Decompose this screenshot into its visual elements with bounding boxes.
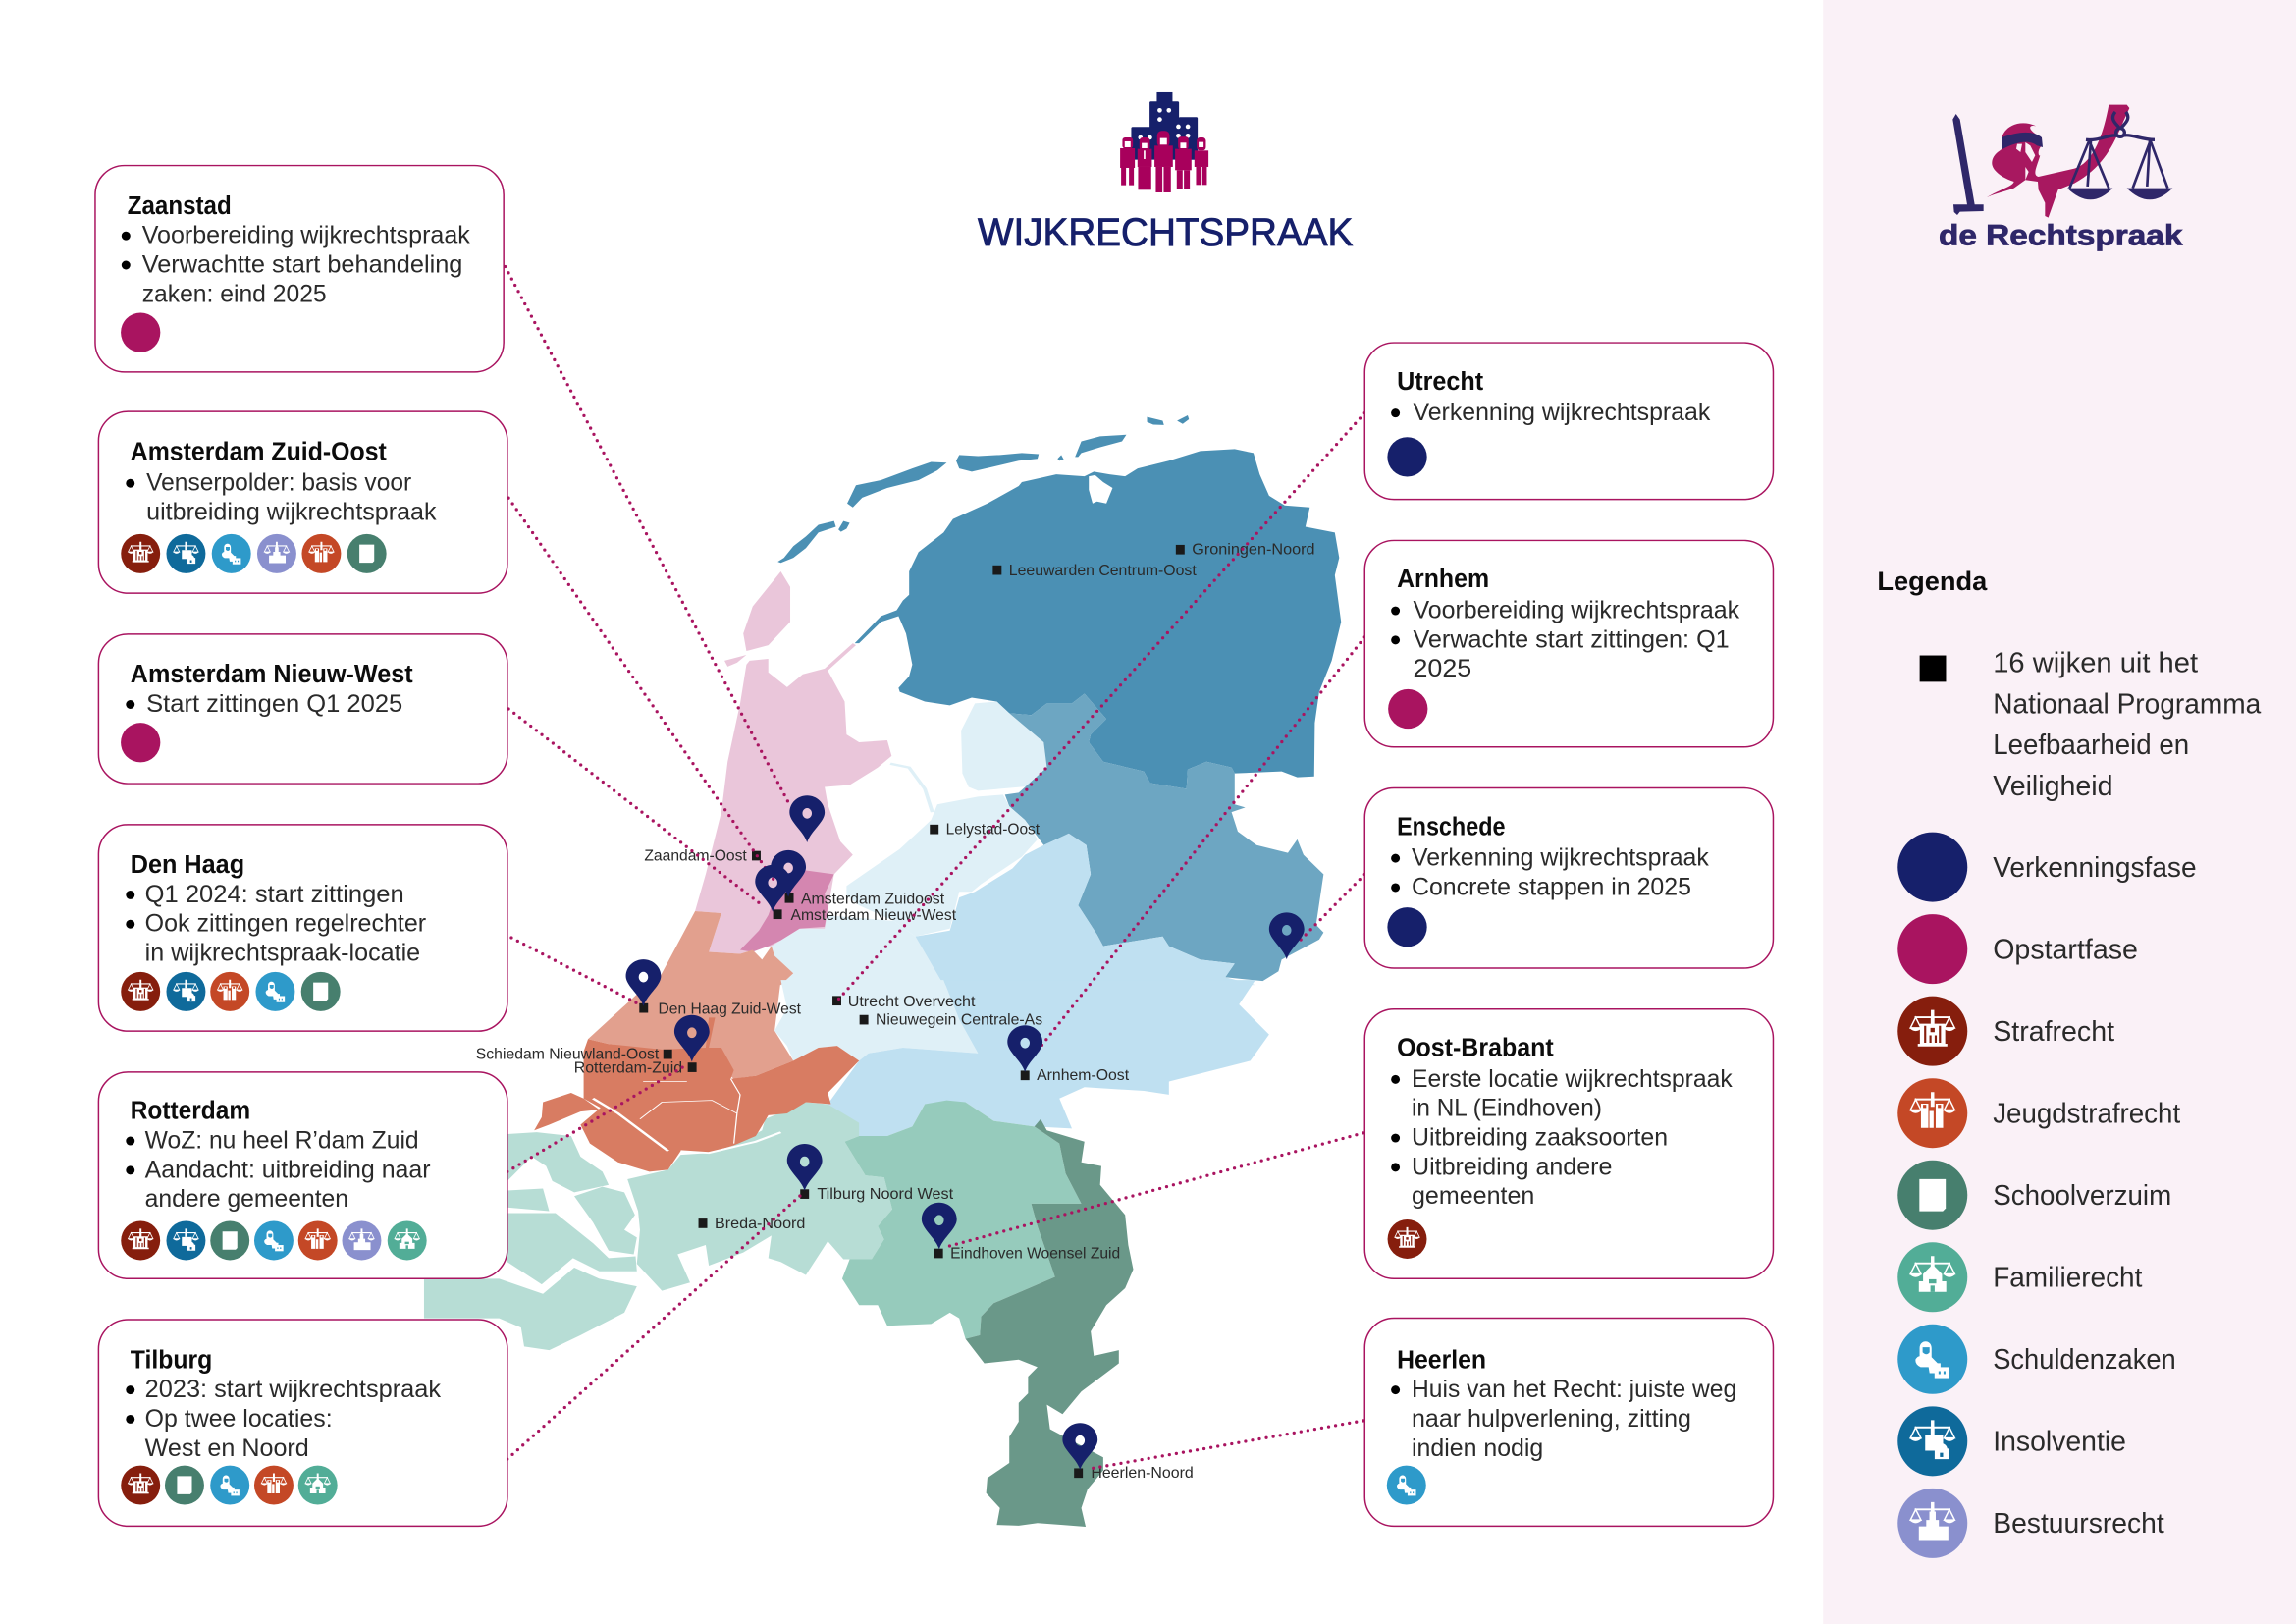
legend item: Familierecht [1897,1242,2142,1312]
panel: Amsterdam Nieuw-West [98,634,507,784]
pin: Arnhem [1007,1025,1042,1072]
legend item: Bestuursrecht: Bestuursrecht [1993,1508,2164,1540]
right side panel background [1823,0,2296,1624]
Zeeland and West-Brabant [424,1103,892,1350]
marker: Groningen-Noord: Groningen-Noord [1192,542,1315,559]
legend item: Bestuursrecht [1897,1489,2164,1558]
phase dot: verkenningsfase [1387,437,1427,477]
bullet list: Concrete stappen in 2025 [1412,874,1691,900]
heading: Rotterdam [131,1096,250,1125]
bullet list [1391,1066,1733,1210]
bullet list [126,1377,442,1462]
icon: scales [2069,112,2167,189]
phase dot: opstartfase [121,312,160,352]
panel: Tilburg [98,1320,507,1526]
bullet list: Huis van het Recht: juiste weg [1412,1377,1736,1403]
pin: Amsterdam Zuid-Oost [771,850,806,897]
bullet list: Q1 2024: start zittingen [145,882,404,908]
case type icons [121,972,341,1011]
legend item: 16 wijken: 16 wijken uit het [1993,648,2198,679]
phase dot: opstartfase [1388,689,1427,729]
heading: Amsterdam Nieuw-West [131,659,413,688]
icon: schuldenzaken [1387,1466,1426,1505]
pin: Eindhoven [922,1203,957,1249]
bullet list [126,1127,431,1213]
legend item: Schuldenzaken: Schuldenzaken [1993,1344,2176,1376]
Gelderland upper [916,834,1255,985]
bullet list: Aandacht: uitbreiding naar [145,1157,431,1183]
map: northern and eastern provinces [656,415,1341,985]
panel: Utrecht [1364,343,1773,500]
marker: Amsterdam Nieuw-West: Amsterdam Nieuw-West [791,907,957,924]
heading: Utrecht [1397,366,1483,396]
phase dot: opstartfase [121,723,160,762]
Utrecht upper [772,915,943,985]
legend item: Schoolverzuim: Schoolverzuim [1993,1180,2171,1212]
marker: Breda-Noord: Breda-Noord [715,1216,805,1232]
bullet list: in wijkrechtspraak-locatie [145,941,420,967]
bullet list: Ook zittingen regelrechter [145,911,426,938]
legend item: Opstartfase [1897,914,2138,984]
legend item: Insolventie [1897,1406,2126,1476]
heading: Enschede [1397,811,1505,840]
title: WIJKRECHTSPRAAK [978,211,1353,254]
legend item: Verkenningsfase: Verkenningsfase [1993,852,2197,884]
logo: de Rechtspraak [1939,105,2183,251]
Flevoland north [961,701,1057,790]
bullet list: WoZ: nu heel R’dam Zuid [145,1127,419,1154]
legend item: Verkenningsfase [1897,833,2197,902]
panel: Oost-Brabant [1364,1009,1773,1278]
bullet list: West en Noord [145,1435,309,1462]
bullet list: Uitbreiding andere [1412,1154,1612,1180]
bullet list: andere gemeenten [145,1186,348,1213]
phase dot: verkenningsfase [1387,907,1427,947]
Zuid-Holland upper [656,911,793,985]
bullet list [1391,845,1710,900]
panel: Zaanstad [95,166,504,372]
case type icons [121,1466,338,1505]
Gelderland lower [828,980,1269,1136]
bullet list: Voorbereiding wijkrechtspraak [142,223,471,249]
marker: Leeuwarden Centrum-Oost: Leeuwarden Centrum-Oost [1009,563,1197,579]
panel: Rotterdam [98,1072,507,1278]
legend item: 16 wijken: Leefbaarheid en [1993,730,2189,761]
heading: Amsterdam Zuid-Oost [131,436,387,465]
legend item: Strafrecht: Strafrecht [1993,1016,2114,1048]
marker: Utrecht Overvecht: Utrecht Overvecht [848,994,976,1010]
legend item: 16 wijken: Nationaal Programma [1993,688,2261,720]
Markermeer dike [890,764,933,812]
marker: Schiedam Nieuwland-Oost: Schiedam Nieuwland-Oost [476,1047,660,1063]
Zuid-Holland [588,980,793,1079]
pin: Den Haag [626,959,661,1006]
heading: Zaanstad [128,190,232,220]
marker: Heerlen-Noord: Heerlen-Noord [1091,1465,1194,1482]
icon: lady justice [1987,105,2129,218]
bullet list: naar hulpverlening, zitting [1412,1406,1691,1433]
neighbourhood markers and labels [476,542,1315,1482]
panel: Amsterdam Zuid-Oost [98,411,507,593]
Amsterdam [740,870,834,952]
bullet list [126,470,437,526]
pin: Amsterdam Nieuw-West [755,865,790,912]
Rotterdam and Zuid-Holland islands [580,1017,859,1171]
bullet list: gemeenten [1412,1183,1534,1210]
pin: Heerlen [1062,1423,1097,1470]
bullet list: Venserpolder: basis voor [146,470,411,497]
panel: Enschede [1364,788,1773,968]
icon: sword [1952,114,1984,215]
marker: Arnhem-Oost: Arnhem-Oost [1037,1067,1130,1084]
bullet list [122,223,471,307]
blindfold [2002,133,2043,149]
bullet list: Verwachte start zittingen: Q1 [1413,626,1730,653]
water channels [640,1079,740,1144]
bullet list: Voorbereiding wijkrechtspraak [1413,597,1740,623]
bullet list: zaken: eind 2025 [142,281,327,307]
pin: Rotterdam [674,1015,710,1061]
heading: Arnhem [1397,564,1489,593]
bullet list: Op twee locaties: [145,1406,333,1433]
legend item: Insolventie: Insolventie [1993,1427,2126,1458]
legend item: Schoolverzuim [1897,1161,2171,1230]
title block: Wijkrechtspraak logo [978,92,1353,254]
bullet list: Start zittingen Q1 2025 [146,691,402,718]
dotted connector lines [506,266,1364,1469]
heading: Den Haag [131,849,244,879]
marker: Lelystad-Oost: Lelystad-Oost [946,822,1041,839]
legend item: Jeugdstrafrecht [1897,1078,2180,1148]
legend item: Schuldenzaken [1897,1325,2176,1394]
legend item: Jeugdstrafrecht: Jeugdstrafrecht [1993,1098,2180,1129]
bullet list: in NL (Eindhoven) [1412,1096,1602,1122]
marker: Den Haag Zuid-West: Den Haag Zuid-West [659,1001,802,1017]
marker: Zaandam-Oost: Zaandam-Oost [644,847,747,864]
map: southern provinces [424,980,1269,1527]
case type icons [121,1221,427,1260]
bullet list: Eerste locatie wijkrechtspraak [1412,1066,1733,1093]
bullet list: 2023: start wijkrechtspraak [145,1377,442,1403]
marker: Tilburg Noord West: Tilburg Noord West [817,1186,954,1203]
legend item: 16 wijken: Veiligheid [1993,771,2113,802]
Utrecht lower [774,980,978,1060]
bullet list: Verwachtte start behandeling [142,251,462,278]
Wadden islands [777,415,1189,563]
case type icons [121,534,387,573]
bullet list [1391,597,1740,682]
panel: Arnhem [1364,540,1773,747]
Overijssel [1005,694,1323,981]
marker: Eindhoven Woensel Zuid: Eindhoven Woensel Zuid [950,1245,1120,1262]
pin: Zaanstad [789,795,825,842]
icon: buildings and people [1120,92,1208,192]
Flevoland south [846,794,1038,937]
Waddenzee mud flat detail [1089,475,1112,504]
legend heading: Legenda [1877,567,1988,596]
panel: Den Haag [98,825,507,1031]
marker: Nieuwegein Centrale-As: Nieuwegein Centrale-As [876,1011,1042,1028]
bullet list [126,882,426,967]
Limburg [966,1119,1133,1527]
legend item: 16 wijken [1920,648,2261,802]
logo wordmark: de Rechtspraak [1939,219,2183,251]
marker: Rotterdam-Zuid: Rotterdam-Zuid [574,1060,682,1077]
icon: strafrecht [1388,1219,1427,1259]
pin: Tilburg [787,1144,823,1191]
Oost-Brabant [842,1101,1082,1339]
bullet list: indien nodig [1412,1435,1543,1462]
bullet list: Uitbreiding zaaksoorten [1412,1125,1668,1152]
Walcheren [534,1093,600,1130]
bullet list: 2025 [1413,656,1471,682]
legend item: Strafrecht [1897,997,2114,1066]
legend item: Familierecht: Familierecht [1993,1262,2142,1293]
legend item: Opstartfase: Opstartfase [1993,934,2138,965]
bullet list [1391,1377,1736,1462]
heading: Heerlen [1397,1344,1486,1374]
Noord-Holland and Texel [695,571,891,954]
heading: Oost-Brabant [1397,1033,1554,1062]
heading: Tilburg [131,1344,212,1374]
pin: Enschede [1269,912,1305,959]
marker: Amsterdam Zuidoost: Amsterdam Zuidoost [801,891,945,907]
legend [1877,567,2261,1558]
location pins [626,795,1305,1470]
bullet list: Verkenning wijkrechtspraak [1412,845,1710,872]
Groningen, Friesland, Drenthe [855,449,1341,788]
bullet list: Verkenning wijkrechtspraak [1413,400,1711,426]
bullet list: uitbreiding wijkrechtspraak [146,500,437,526]
map of the Netherlands [424,415,1341,1527]
panel: Heerlen [1364,1319,1773,1526]
